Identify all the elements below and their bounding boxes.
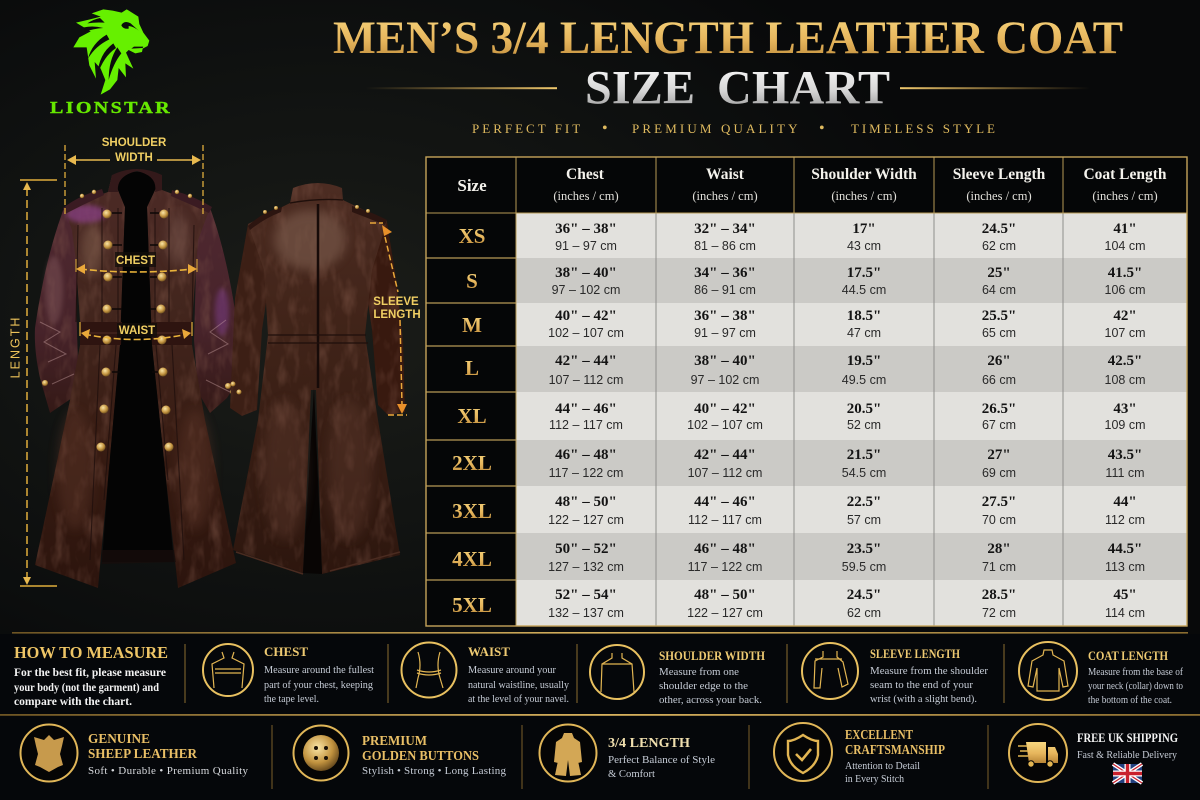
button loops [112, 213, 159, 372]
feature: excellent craftsmanship: EXCELLENT [845, 728, 914, 743]
tagline: TIMELESS STYLE [851, 121, 995, 136]
panel: chest: part of your chest, keeping [264, 679, 373, 691]
row M: 102 – 107 cm [548, 326, 624, 340]
feature: premium golden buttons: PREMIUM [362, 734, 427, 749]
heading line two: CHART [717, 62, 890, 114]
row 4XL: 127 – 132 cm [548, 560, 624, 574]
measurement: length [8, 180, 57, 586]
heading line one: MEN’S 3/4 LENGTH LEATHER COAT [333, 12, 1123, 64]
row M: 65 cm [982, 326, 1016, 340]
row S: S [466, 269, 478, 293]
row M: 18.5" [847, 308, 881, 324]
feature: excellent craftsmanship [774, 723, 945, 785]
panel: chest [203, 644, 374, 705]
panel: how to measure [14, 643, 168, 708]
row XL: 67 cm [982, 418, 1016, 432]
header row: Coat Length [1083, 166, 1167, 183]
logo: Lionstar [50, 9, 172, 117]
icon: UK flag [1113, 764, 1142, 783]
tagline: PERFECT FIT [472, 121, 580, 136]
row S: 25" [987, 265, 1011, 281]
row XS: 91 – 97 cm [555, 239, 617, 253]
coat back [230, 183, 405, 574]
row S: 97 – 102 cm [552, 283, 620, 297]
row L: 97 – 102 cm [691, 373, 759, 387]
row 2XL: 46" – 48" [555, 447, 617, 463]
panel: sleeve length: wrist (with a slight bend). [870, 693, 977, 705]
title [333, 12, 1123, 137]
row XL: 109 cm [1104, 418, 1146, 432]
header row: (inches / cm) [553, 189, 619, 203]
feature: genuine sheep leather [20, 724, 248, 782]
back body [233, 183, 400, 574]
row 5XL: 24.5" [847, 587, 881, 603]
row XS: 36" – 38" [555, 221, 617, 237]
row XL [457, 401, 1146, 432]
header row: (inches / cm) [831, 189, 897, 203]
back highlights [274, 210, 346, 270]
row 2XL: 107 – 112 cm [688, 466, 762, 480]
panel: waist: natural waistline, usually [468, 679, 569, 691]
epaulettes [63, 189, 212, 214]
placket seams [76, 208, 194, 560]
heading line two: SIZE [585, 62, 695, 114]
measurement: shoulder width [65, 137, 203, 215]
back sleeves [230, 222, 405, 416]
row XL: 26.5" [982, 401, 1016, 417]
row M: 36" – 38" [694, 308, 756, 324]
header row: (inches / cm) [692, 189, 758, 203]
measurement: shoulder width: WIDTH [115, 152, 153, 164]
row XS [459, 221, 1146, 253]
row 2XL: 27" [987, 447, 1011, 463]
row 3XL: 3XL [452, 499, 492, 523]
row XL: 112 – 117 cm [549, 418, 623, 432]
row 4XL: 23.5" [847, 541, 881, 557]
row XL: 44" – 46" [555, 401, 617, 417]
panel: sleeve length: Measure from the shoulder [870, 665, 988, 677]
panel: sleeve length: seam to the end of your [870, 679, 973, 691]
row L: 38" – 40" [694, 353, 756, 369]
tagline: • [602, 120, 608, 137]
row 3XL: 44" – 46" [694, 494, 756, 510]
row XS: 17" [852, 221, 876, 237]
icon: sleeve [802, 643, 858, 699]
row 3XL: 112 cm [1105, 513, 1145, 527]
row S: 41.5" [1108, 265, 1142, 281]
row 5XL: 45" [1113, 587, 1137, 603]
row L: 108 cm [1104, 373, 1146, 387]
row 4XL: 117 – 122 cm [688, 560, 762, 574]
row L: 49.5 cm [842, 373, 886, 387]
row 4XL: 50" – 52" [555, 541, 617, 557]
row 2XL: 43.5" [1108, 447, 1142, 463]
intro text: compare with the chart. [14, 696, 132, 708]
row 2XL: 2XL [452, 451, 492, 475]
row XL: 43" [1113, 401, 1137, 417]
panel: chest: CHEST [264, 644, 308, 659]
size column background [426, 213, 516, 626]
intro text [14, 667, 166, 708]
row M: 91 – 97 cm [694, 326, 756, 340]
panel: coat length: Measure from the base of [1088, 666, 1183, 678]
row S: 17.5" [847, 265, 881, 281]
header row: Waist [706, 166, 745, 183]
row 2XL: 117 – 122 cm [549, 466, 623, 480]
icon: waist [402, 642, 456, 698]
row 5XL: 132 – 137 cm [548, 606, 624, 620]
bottom band background [0, 634, 1200, 800]
row 3XL: 22.5" [847, 494, 881, 510]
coat front [35, 169, 237, 588]
icon: leather hide [20, 724, 78, 782]
row XS: 43 cm [847, 239, 881, 253]
row XS: 104 cm [1104, 239, 1146, 253]
row XL: 102 – 107 cm [687, 418, 763, 432]
row XL: XL [457, 404, 487, 428]
row L: 42" – 44" [555, 353, 617, 369]
feature: free UK shipping: Fast & Reliable Delivery [1077, 749, 1177, 761]
panel: waist [402, 642, 569, 705]
body panels [35, 175, 236, 588]
icon: button [294, 726, 348, 780]
row 2XL: 69 cm [982, 466, 1016, 480]
row 3XL: 27.5" [982, 494, 1016, 510]
row 3XL: 48" – 50" [555, 494, 617, 510]
intro text: your body (not the garment) and [14, 682, 160, 694]
panel: sleeve length [802, 643, 988, 705]
panel: chest: the tape level. [264, 693, 319, 705]
row 2XL: 21.5" [847, 447, 881, 463]
feature: genuine sheep leather: GENUINE [88, 732, 150, 747]
row S: 64 cm [982, 283, 1016, 297]
feature: premium golden buttons [294, 726, 506, 780]
icon: green lion head [73, 9, 149, 95]
row XL: 40" – 42" [694, 401, 756, 417]
feature: free UK shipping: FREE UK SHIPPING [1077, 730, 1178, 745]
panel: shoulder width: SHOULDER WIDTH [659, 648, 765, 663]
row S: 44.5 cm [842, 283, 886, 297]
intro text: For the best fit, please measure [14, 667, 166, 679]
feature: premium golden buttons: Stylish • Strong • Long Lasting [362, 765, 506, 777]
wordmark: LIONSTAR [50, 98, 172, 117]
panel: sleeve length: SLEEVE LENGTH [870, 646, 960, 661]
row 3XL: 112 – 117 cm [688, 513, 762, 527]
panel: waist: at the level of your navel. [468, 693, 569, 705]
row XS: 81 – 86 cm [694, 239, 756, 253]
row 5XL: 122 – 127 cm [687, 606, 763, 620]
header row: (inches / cm) [966, 189, 1032, 203]
row 3XL: 70 cm [982, 513, 1016, 527]
icon: chest [203, 644, 253, 696]
row 4XL: 4XL [452, 547, 492, 571]
row L: 66 cm [982, 373, 1016, 387]
header row: (inches / cm) [1092, 189, 1158, 203]
row 3XL: 122 – 127 cm [548, 513, 624, 527]
feature: genuine sheep leather: SHEEP LEATHER [88, 747, 198, 762]
row 2XL: 42" – 44" [694, 447, 756, 463]
panel: coat length: the bottom of the coat. [1088, 694, 1172, 706]
feature: 3/4 length: 3/4 LENGTH [608, 736, 690, 751]
gold buttons [42, 190, 236, 452]
row L: L [465, 356, 479, 380]
icon: coat length [1019, 642, 1077, 700]
panel: coat length [1019, 642, 1183, 706]
row XS: 62 cm [982, 239, 1016, 253]
feature: genuine sheep leather: Soft • Durable • Premium Quality [88, 765, 248, 777]
row 5XL: 62 cm [847, 606, 881, 620]
row S: 38" – 40" [555, 265, 617, 281]
row 5XL: 114 cm [1105, 606, 1145, 620]
row XS: 41" [1113, 221, 1137, 237]
feature: 3/4 length [540, 724, 715, 782]
row S [466, 265, 1146, 297]
row S: 86 – 91 cm [694, 283, 756, 297]
row XS: XS [459, 224, 485, 248]
header row: Size [457, 176, 487, 195]
row S: 34" – 36" [694, 265, 756, 281]
row M: 40" – 42" [555, 308, 617, 324]
row M: 25.5" [982, 308, 1016, 324]
row 2XL: 111 cm [1105, 466, 1145, 480]
row L: 107 – 112 cm [549, 373, 623, 387]
feature: excellent craftsmanship: Attention to Detail [845, 760, 920, 772]
row 3XL: 57 cm [847, 513, 881, 527]
measurement: shoulder width: SHOULDER [102, 137, 167, 149]
row XS: 32" – 34" [694, 221, 756, 237]
panel: shoulder width [590, 645, 765, 706]
row L: 42.5" [1108, 353, 1142, 369]
row 5XL [452, 587, 1145, 620]
feature: 3/4 length: & Comfort [608, 768, 655, 780]
row M: 47 cm [847, 326, 881, 340]
row 4XL: 71 cm [982, 560, 1016, 574]
row 4XL: 28" [987, 541, 1011, 557]
panel: shoulder width: shoulder edge to the [659, 680, 748, 692]
row M: 107 cm [1104, 326, 1146, 340]
measurement: sleeve length: SLEEVE [373, 296, 419, 308]
panel: shoulder width: other, across your back. [659, 694, 762, 706]
row 4XL: 44.5" [1108, 541, 1142, 557]
row L: 26" [987, 353, 1011, 369]
icon: shield check [774, 723, 832, 781]
row L [465, 353, 1146, 387]
row L: 19.5" [847, 353, 881, 369]
measurement: length: LENGTH [8, 316, 22, 378]
icon: truck [1009, 724, 1067, 782]
header row [426, 157, 1187, 213]
row 2XL [452, 447, 1145, 480]
feature: excellent craftsmanship: in Every Stitch [845, 773, 904, 785]
sleeves [35, 208, 237, 413]
measurement: sleeve length: LENGTH [373, 309, 421, 321]
collar [108, 169, 162, 192]
tagline: PREMIUM QUALITY [632, 121, 798, 136]
row S: 106 cm [1104, 283, 1146, 297]
row M [462, 308, 1146, 340]
header row: Shoulder Width [811, 166, 917, 183]
row XS: 24.5" [982, 221, 1016, 237]
measurement: chest [76, 252, 197, 274]
row M: M [462, 313, 482, 337]
panel: waist: Measure around your [468, 664, 556, 676]
header row: Sleeve Length [953, 166, 1046, 183]
row 2XL: 54.5 cm [842, 466, 886, 480]
panel: coat length: COAT LENGTH [1088, 648, 1168, 663]
row XL: 52 cm [847, 418, 881, 432]
row 5XL: 72 cm [982, 606, 1016, 620]
feature: free UK shipping [1009, 724, 1178, 783]
feature: excellent craftsmanship: CRAFTSMANSHIP [845, 743, 945, 758]
header row: Chest [566, 166, 605, 183]
panel: waist: WAIST [468, 644, 510, 659]
icon: shoulder [590, 645, 644, 699]
panel: chest: Measure around the fullest [264, 664, 374, 676]
measurement: chest: CHEST [116, 255, 155, 267]
row XL: 20.5" [847, 401, 881, 417]
row 4XL: 113 cm [1105, 560, 1145, 574]
measurement: sleeve length [370, 223, 421, 415]
tagline: • [819, 120, 825, 137]
icon: coat [540, 724, 596, 782]
row 5XL: 48" – 50" [694, 587, 756, 603]
feature: premium golden buttons: GOLDEN BUTTONS [362, 749, 479, 764]
row 4XL: 59.5 cm [842, 560, 886, 574]
row 4XL: 46" – 48" [694, 541, 756, 557]
measurement: waist [80, 322, 192, 340]
row 5XL: 28.5" [982, 587, 1016, 603]
row stripes [516, 213, 1187, 626]
size table [426, 157, 1187, 626]
row 3XL: 44" [1113, 494, 1137, 510]
row 3XL [452, 494, 1145, 527]
row 5XL: 52" – 54" [555, 587, 617, 603]
row 5XL: 5XL [452, 593, 492, 617]
measurement: waist: WAIST [119, 325, 155, 337]
belt [80, 322, 192, 345]
heading: HOW TO MEASURE [14, 643, 168, 662]
panel: shoulder width: Measure from one [659, 666, 739, 678]
highlights [66, 205, 106, 223]
row M: 42" [1113, 308, 1137, 324]
feature: 3/4 length: Perfect Balance of Style [608, 754, 715, 766]
row 4XL [452, 541, 1145, 574]
